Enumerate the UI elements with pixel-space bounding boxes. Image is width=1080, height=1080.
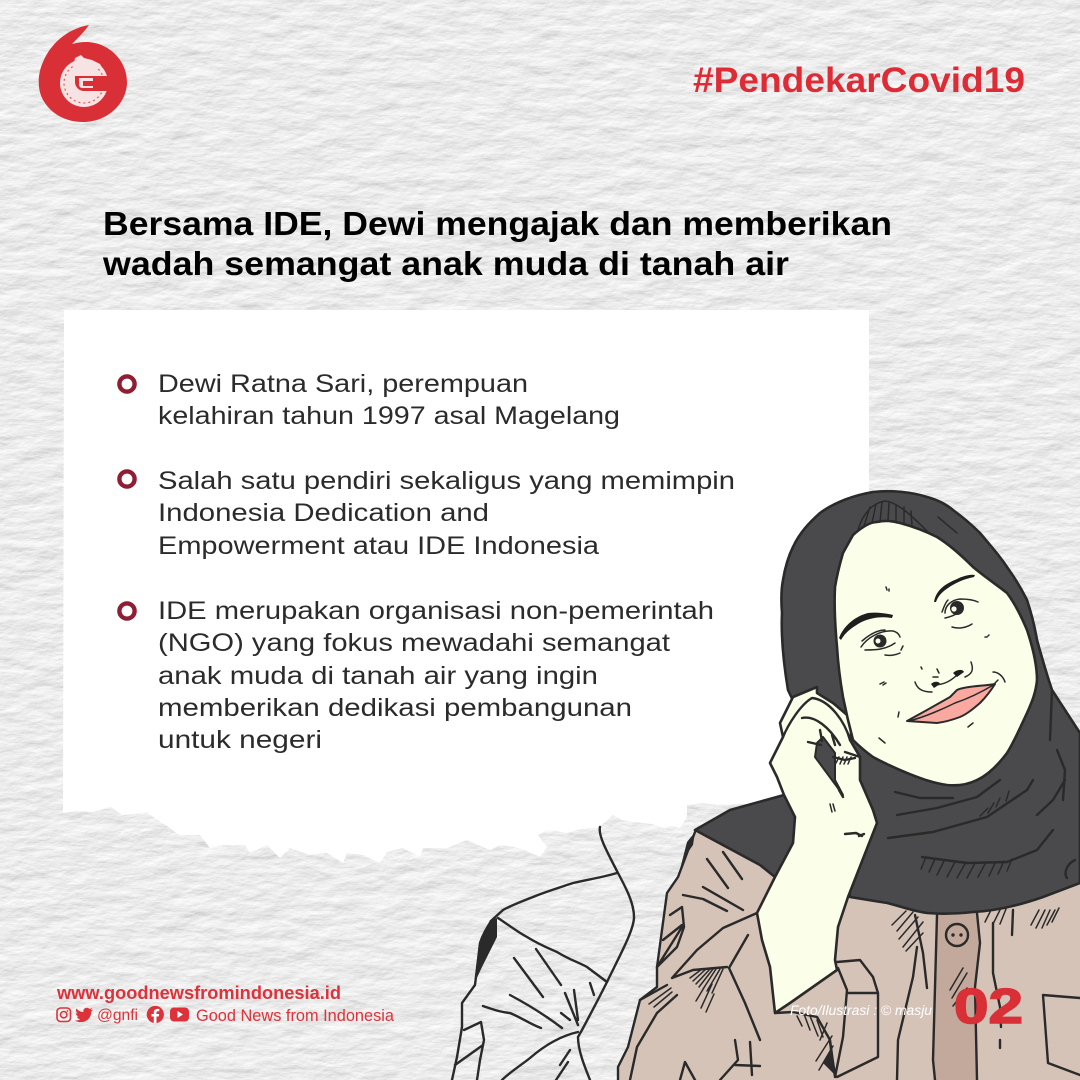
bullet 3: anak muda di tanah air yang ingin [158,662,598,690]
neck crease [845,833,864,836]
bullet 2: Empowerment atau IDE Indonesia [158,532,599,560]
icon: facebook [147,1006,164,1023]
shirt [618,832,1080,1080]
bullet 2: Indonesia Dedication and [158,499,489,527]
face [835,521,1037,785]
panel: torn white paper [63,310,869,863]
hijab [781,491,1080,914]
lips [907,684,995,723]
brows and eyes [839,575,978,655]
bullet 1: kelahiran tahun 1997 asal Magelang [158,402,620,430]
face marks [879,587,989,743]
icon: instagram [57,1008,70,1022]
fingers [783,698,860,797]
logo: Good News from Indonesia [39,25,127,122]
bullet 3 [119,597,714,754]
icon: twitter [75,1008,93,1022]
social name: Good News from Indonesia [196,1006,395,1025]
icon: youtube [170,1008,189,1022]
shirt line work [630,832,1080,1080]
shirt placket [933,913,980,1080]
bullet 2 [119,467,735,560]
nostrils [931,670,964,688]
website url: www.goodnewsfromindonesia.id [56,982,341,1003]
gap between fingers [815,737,843,795]
neck and hand [757,687,877,1013]
bullet 3: memberikan dedikasi pembangunan [158,694,632,722]
illustration: outline sketch of sleeve [452,827,634,1080]
bullet 1: Dewi Ratna Sari, perempuan [158,370,528,398]
hijab folds [888,690,1075,878]
bullet 3: (NGO) yang fokus mewadahi semangat [158,629,670,657]
dark shoulder drape [695,795,810,877]
photo credit: Foto/Ilustrasi : © masju [790,1003,932,1018]
shirt outline [618,832,695,1080]
lip line and smile [909,672,1005,721]
bullet 1 [119,370,620,430]
nose [915,662,972,692]
social row [57,1006,395,1025]
bullet 2: Salah satu pendiri sekaligus yang memimpin [158,467,735,495]
finger hatching [830,757,851,812]
page number: 02 [954,980,1023,1034]
bullet 3: IDE merupakan organisasi non-pemerintah [158,597,714,625]
title [102,205,892,282]
handle: @gnfi [97,1007,138,1024]
bullet 3: untuk negeri [158,726,322,754]
illustration: woman in hijab [618,491,1080,1080]
title: wadah semangat anak muda di tanah air [102,245,789,282]
hood band [858,501,957,533]
hashtag: #PendekarCovid19 [693,61,1025,100]
title: Bersama IDE, Dewi mengajak dan memberikan [103,205,892,242]
